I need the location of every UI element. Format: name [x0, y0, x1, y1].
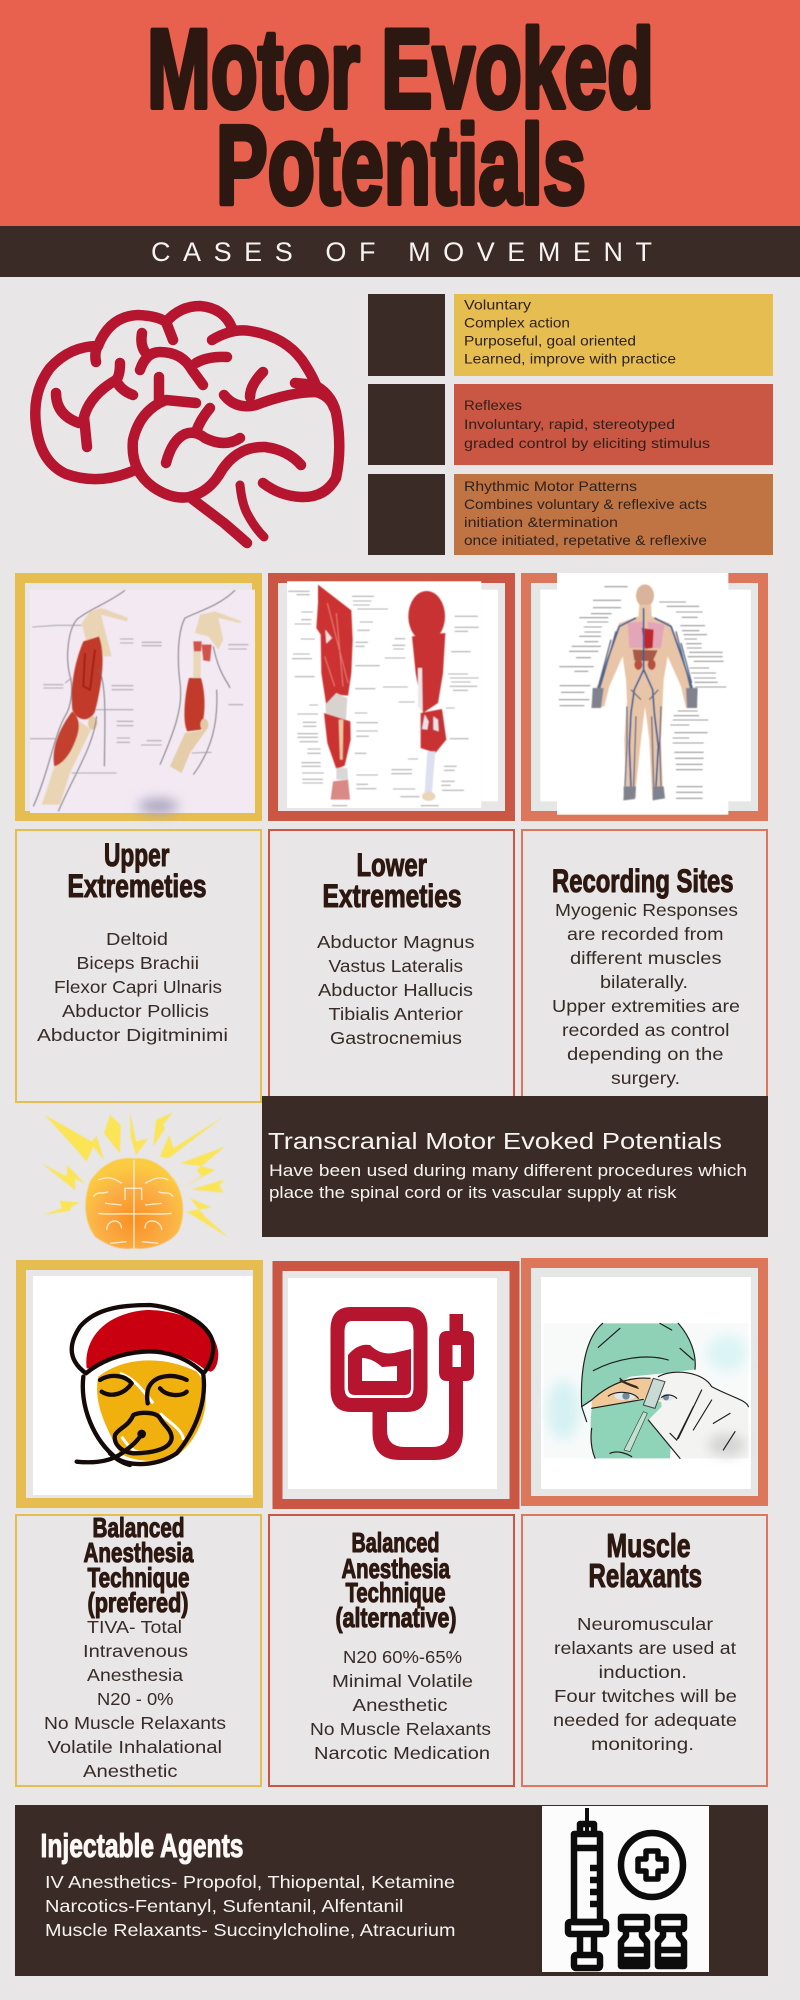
- image panel: surgeon with syringe: [526, 1263, 763, 1501]
- heading: [322, 847, 462, 914]
- row: reflexes: graded control by eliciting stimulus: [464, 435, 710, 451]
- panel: recording sites: [522, 830, 767, 1102]
- heading: (prefered): [88, 1587, 188, 1618]
- heading: Extremeties: [68, 868, 206, 904]
- panel: balanced anesthesia alternative: [269, 1515, 514, 1786]
- description: different muscles: [570, 948, 722, 968]
- row: rhythmic motor patterns: [368, 474, 773, 555]
- heading: [336, 1527, 456, 1633]
- description: bilaterally.: [600, 972, 688, 992]
- row: rhythmic motor patterns: Rhythmic Motor Patterns: [464, 478, 637, 494]
- description: Anesthetic: [352, 1695, 448, 1715]
- image panel: circulatory body: [526, 573, 763, 816]
- heading: [84, 1512, 194, 1618]
- heading: Injectable Agents: [40, 1827, 244, 1864]
- description: Minimal Volatile: [332, 1671, 473, 1691]
- row: rhythmic motor patterns: Combines voluntary & reflexive acts: [464, 496, 707, 512]
- description: recorded as control: [562, 1020, 730, 1040]
- heading: Upper: [104, 837, 170, 873]
- icon: syringe and vials: [542, 1806, 709, 1972]
- description: [44, 1617, 226, 1781]
- heading: Lower: [356, 847, 427, 883]
- heading: Relaxants: [588, 1557, 702, 1594]
- heading: (alternative): [336, 1602, 456, 1633]
- muscle list: Abductor Digitminimi: [37, 1025, 228, 1045]
- description: [552, 900, 740, 1088]
- agent list: Muscle Relaxants- Succinylcholine, Atracurium: [45, 1920, 456, 1940]
- header banner: [0, 0, 800, 228]
- description: N20 - 0%: [97, 1689, 174, 1709]
- heading: [588, 1527, 702, 1594]
- muscle list: [37, 929, 228, 1045]
- subtitle band: CASES OF MOVEMENT: [151, 237, 652, 267]
- agent list: Narcotics-Fentanyl, Sufentanil, Alfentanil: [45, 1896, 404, 1916]
- description: N20 60%-65%: [343, 1647, 462, 1667]
- callout: transcranial motor evoked potentials: place the spinal cord or its vascular supply at risk: [269, 1184, 677, 1202]
- row: voluntary: Complex action: [464, 314, 570, 330]
- muscle list: Tibialis Anterior: [328, 1004, 463, 1024]
- agent list: [45, 1872, 456, 1940]
- row: reflexes: Reflexes: [464, 397, 522, 413]
- agent list: IV Anesthetics- Propofol, Thiopental, Ketamine: [45, 1872, 455, 1892]
- muscle list: Vastus Lateralis: [328, 956, 463, 976]
- description: TIVA- Total: [87, 1617, 182, 1637]
- description: Anesthetic: [83, 1761, 178, 1781]
- image panel: leg muscles: [273, 578, 510, 816]
- icon: glowing brain with lightning: [42, 1112, 228, 1249]
- description: are recorded from: [567, 924, 724, 944]
- title: [147, 6, 654, 228]
- heading: Balanced: [352, 1527, 440, 1558]
- description: depending on the: [567, 1044, 724, 1064]
- callout: transcranial motor evoked potentials: Transcranial Motor Evoked Potentials: [268, 1128, 722, 1154]
- muscle list: Biceps Brachii: [76, 953, 199, 973]
- callout: transcranial motor evoked potentials: Have been used during many different procedures which: [269, 1162, 747, 1180]
- heading: Recording Sites: [552, 863, 734, 899]
- description: Four twitches will be: [554, 1686, 737, 1706]
- image panel: iv bag: [278, 1266, 514, 1504]
- panel: movement types: [368, 294, 773, 555]
- description: No Muscle Relaxants: [310, 1719, 491, 1739]
- description: Narcotic Medication: [314, 1743, 490, 1763]
- description: induction.: [598, 1662, 687, 1682]
- image panel: arm muscles: [20, 578, 257, 816]
- panel: muscle relaxants: [522, 1515, 767, 1786]
- muscle list: [317, 932, 475, 1048]
- row: voluntary: [368, 294, 773, 376]
- row: rhythmic motor patterns: once initiated, repetative & reflexive: [464, 532, 707, 548]
- icon: red outline brain: [35, 306, 339, 543]
- description: No Muscle Relaxants: [44, 1713, 226, 1733]
- row: reflexes: Involuntary, rapid, stereotyped: [464, 416, 675, 432]
- row: voluntary: Voluntary: [464, 296, 531, 312]
- description: Upper extremities are: [552, 996, 740, 1016]
- muscle list: Abductor Magnus: [317, 932, 475, 952]
- heading: Extremeties: [322, 878, 462, 914]
- description: surgery.: [611, 1068, 680, 1088]
- heading: Technique: [88, 1562, 190, 1593]
- heading: Anesthesia: [84, 1537, 194, 1568]
- row: voluntary: Purposeful, goal oriented: [464, 332, 636, 348]
- panel: lower extremeties: [269, 830, 514, 1102]
- row: reflexes: [368, 384, 773, 465]
- row: voluntary: Learned, improve with practice: [464, 350, 676, 366]
- description: Anesthesia: [87, 1665, 183, 1685]
- description: relaxants are used at: [554, 1638, 736, 1658]
- subtitle band: [0, 226, 800, 277]
- panel: balanced anesthesia preferred: [16, 1512, 261, 1786]
- muscle list: Flexor Capri Ulnaris: [54, 977, 222, 997]
- heading: Muscle: [606, 1527, 690, 1564]
- description: Myogenic Responses: [555, 900, 738, 920]
- muscle list: Abductor Hallucis: [318, 980, 473, 1000]
- icon: blood bag: [330, 1307, 474, 1460]
- muscle list: Gastrocnemius: [330, 1028, 462, 1048]
- callout: transcranial motor evoked potentials: [262, 1096, 768, 1237]
- description: [310, 1647, 491, 1763]
- description: needed for adequate: [553, 1710, 737, 1730]
- row: rhythmic motor patterns: initiation &termination: [464, 514, 618, 530]
- muscle list: Deltoid: [106, 929, 168, 949]
- title: Potentials: [216, 102, 586, 228]
- description: Volatile Inhalational: [48, 1737, 222, 1757]
- muscle list: Abductor Pollicis: [62, 1001, 209, 1021]
- heading: [68, 837, 206, 904]
- heading: Balanced: [92, 1512, 184, 1543]
- image panel: anesthesia mask face: [21, 1265, 258, 1503]
- description: monitoring.: [591, 1734, 694, 1754]
- panel: injectable agents: [15, 1805, 768, 1976]
- panel: upper extremeties: [16, 830, 261, 1102]
- description: Intravenous: [83, 1641, 188, 1661]
- description: Neuromuscular: [577, 1614, 713, 1634]
- heading: Technique: [346, 1577, 446, 1608]
- description: [553, 1614, 737, 1754]
- heading: Anesthesia: [342, 1553, 451, 1584]
